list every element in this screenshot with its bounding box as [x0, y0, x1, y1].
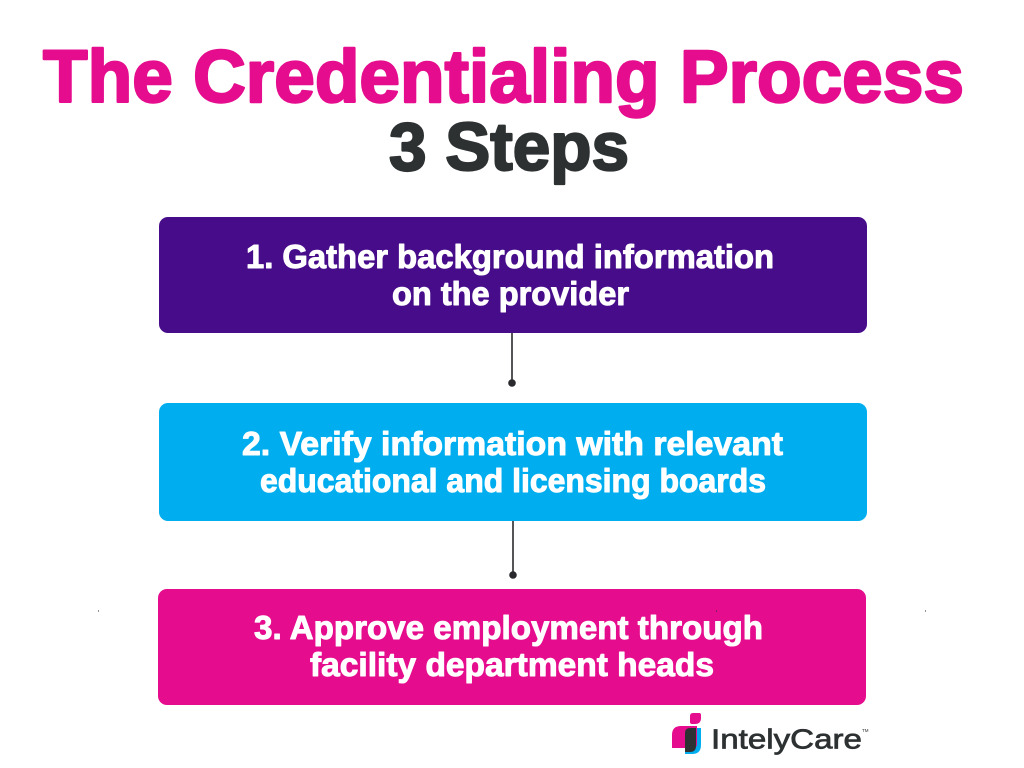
panel: step 3: 3. Approve employment through — [254, 609, 763, 646]
panel: step 1: 1. Gather background information — [246, 238, 774, 275]
specks — [98, 610, 926, 612]
panel: step 3: facility department heads — [310, 646, 714, 683]
trademark mark: TM — [862, 728, 869, 733]
panel: step 3 — [158, 589, 866, 705]
title: The Credentialing Process — [43, 35, 964, 118]
panel: step 1 — [159, 217, 867, 333]
logo wordmark: IntelyCare — [711, 724, 862, 754]
icon: IntelyCare logo mark — [672, 713, 701, 754]
panel: step 2: 2. Verify information with relevant — [242, 425, 783, 462]
panel: step 1: on the provider — [392, 275, 629, 312]
panel: step 2 — [159, 403, 867, 521]
connector: step 2 to step 3 — [509, 521, 517, 579]
panel: step 2: educational and licensing boards — [260, 462, 766, 499]
subtitle: 3 Steps — [389, 109, 629, 185]
connector: step 1 to step 2 — [508, 333, 516, 387]
